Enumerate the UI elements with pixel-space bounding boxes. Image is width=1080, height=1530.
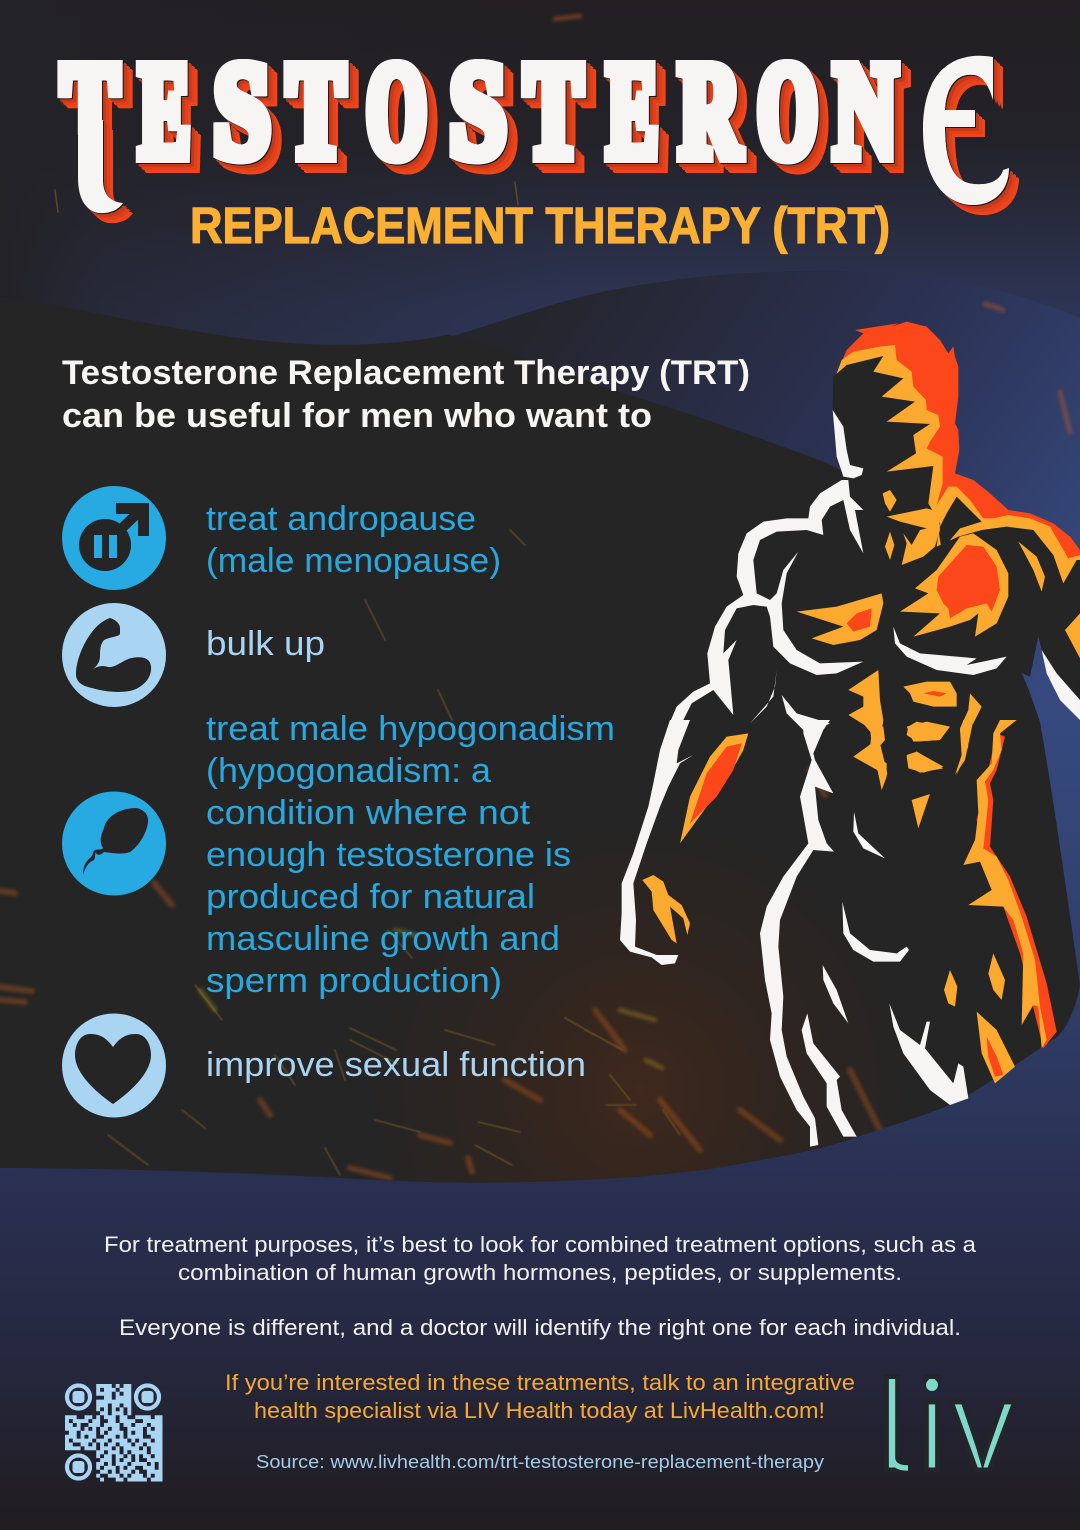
item text: hypogonadism: condition where not [206,794,531,832]
figure: dark silhouette [833,356,1080,720]
item text: hypogonadism [206,710,615,1000]
figure: hand [642,875,690,943]
icon: heart [62,1014,166,1118]
main title word: E [140,34,190,186]
intro heading [62,354,750,435]
footer text: combination of human growth hormones, peptides, or supplements. [178,1260,902,1285]
main title word: R [680,34,742,187]
main title word: E [608,34,658,186]
figure: forearm flame [680,733,748,843]
item text: andropause: (male menopause) [206,542,501,580]
main title word: N [835,34,897,186]
footer text: For treatment purposes, it’s best to look for combined treatment options, such as a [104,1232,977,1257]
footer text [104,1232,977,1340]
item text: bulk up: bulk up [206,625,325,663]
source line: Source: www.livhealth.com/trt-testosterone-replacement-therapy [256,1451,825,1472]
main title word: T [288,34,345,187]
figure: abdomen and side flames [853,720,1057,1083]
main title word: S [451,34,506,186]
item text: hypogonadism: sperm production) [206,962,502,1000]
item text: hypogonadism: enough testosterone is [206,836,571,874]
logo: LIV: l [878,1354,906,1498]
figure: white outlines lower [620,720,968,1147]
main title word: T [526,34,582,187]
intro heading: can be useful for men who want to [62,397,652,435]
QR code [65,1384,162,1482]
main title word: E [930,22,990,238]
logo: LIV: v [951,1354,1016,1498]
item text: sexual function: improve sexual function [206,1046,586,1084]
item text: hypogonadism: masculine growth and [206,920,560,958]
logo: LIV: i [918,1354,946,1498]
item text: hypogonadism: (hypogonadism: a [206,752,491,790]
item text: andropause: treat andropause [206,500,476,538]
sparks [0,529,884,1182]
figure: torso and leg details [848,490,1080,790]
icon: sperm cell [62,792,166,896]
main title word [57,56,1019,224]
main title word: O [367,35,427,187]
logo: LIV [878,1354,1016,1498]
figure: red back glow [837,322,1080,650]
item text: hypogonadism: produced for natural [206,878,535,916]
main title word: S [215,34,270,186]
item text: andropause [206,500,501,580]
figure: white outlines upper [667,410,1080,730]
figure: muscular man [620,322,1080,1147]
figure: left pectoral flame [797,593,883,645]
item text: hypogonadism: treat male hypogonadism [206,710,615,748]
figure: yellow outline [837,345,1080,650]
title [57,56,1019,254]
intro heading: Testosterone Replacement Therapy (TRT) [62,354,750,392]
icon: male symbol [62,486,166,590]
call to action: health specialist via LIV Health today at LivHealth.com! [254,1398,825,1423]
sparks over sky [55,16,1070,432]
figure: lower body [620,720,1057,1147]
footer text: Everyone is different, and a doctor will identify the right one for each individual. [119,1315,961,1340]
call to action [225,1370,855,1423]
main title word: O [758,35,818,187]
main title word: T [62,34,119,187]
icon: flexed arm [62,603,166,707]
subtitle: REPLACEMENT THERAPY (TRT) [190,197,890,254]
call to action: If you’re interested in these treatments, talk to an integrative [225,1370,855,1395]
